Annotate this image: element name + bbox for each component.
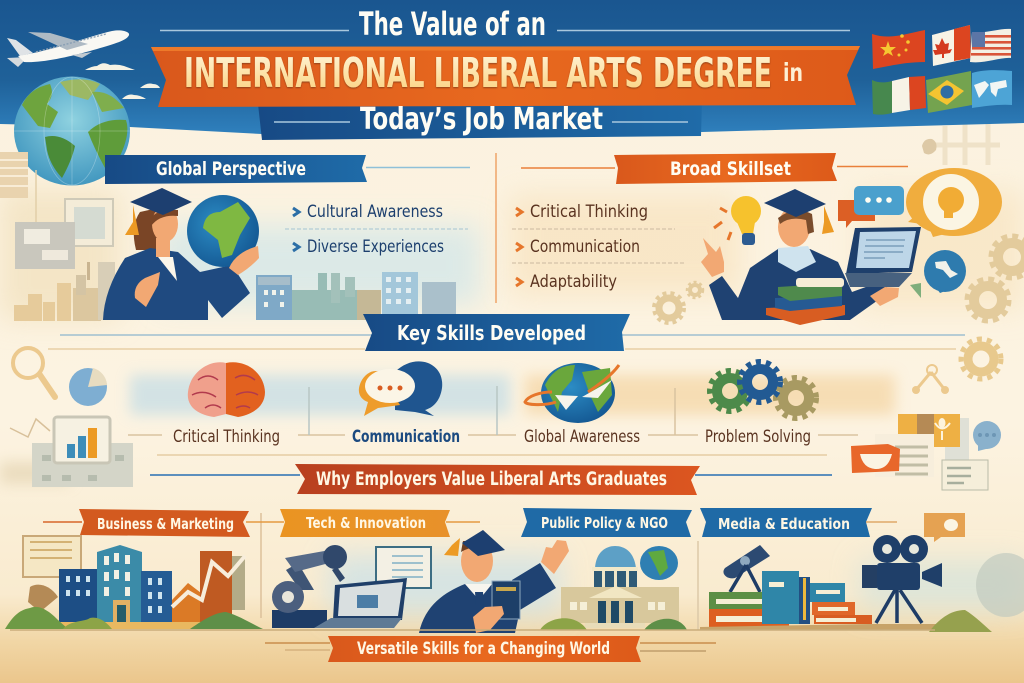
laptop <box>845 227 921 287</box>
section lines <box>48 335 965 349</box>
ribbon: Business & Marketing: Business & Marketing <box>97 515 234 533</box>
icon: orange card <box>851 444 900 473</box>
central graduate <box>419 530 569 633</box>
icon: light bulb <box>714 196 761 245</box>
shrubs, back <box>28 585 58 612</box>
divider <box>260 513 262 618</box>
icon: telescope <box>723 545 770 592</box>
growth chart <box>172 551 245 622</box>
ground strip and shrub <box>700 553 1024 632</box>
title banner <box>151 46 860 107</box>
key skill separators <box>128 386 858 435</box>
flag: USA <box>970 29 1011 62</box>
note board <box>23 536 81 577</box>
icon: small globe <box>640 546 678 580</box>
sector: media and education <box>700 508 1024 632</box>
ground and shrubs <box>5 607 263 629</box>
office buildings <box>59 545 172 622</box>
key skill: communication <box>352 361 460 447</box>
ground line <box>10 629 935 631</box>
ribbon: Media & Education <box>700 508 897 537</box>
ribbon: Public Policy & NGO: Public Policy & NGO <box>541 514 668 532</box>
flag: Italy <box>872 76 926 115</box>
ribbon: Versatile Skills for a Changing World <box>265 636 716 662</box>
icon: movie camera <box>862 535 942 623</box>
list: skill bullets: Adaptability <box>530 272 617 292</box>
ribbon: Tech & Innovation: Tech & Innovation <box>306 514 426 532</box>
icon: orange chat note <box>924 513 965 542</box>
divider <box>697 541 699 630</box>
icon: government building <box>540 546 687 630</box>
icon: brain <box>188 362 265 417</box>
icon: grey note <box>942 460 988 490</box>
decorative left: magnifier, pie, chart building <box>10 348 133 487</box>
title banner: in <box>783 58 803 87</box>
ribbon: Key Skills Developed: Key Skills Developed <box>397 321 586 345</box>
icon: airplane <box>7 30 129 67</box>
flag: China <box>872 30 925 69</box>
panel: broad skillset <box>512 153 1024 325</box>
list: skill bullets <box>512 202 686 292</box>
icon: yellow card with microphone <box>898 414 960 447</box>
ribbon: Today's Job Market <box>258 100 702 140</box>
icon: stacked books <box>709 571 872 627</box>
background washes <box>0 190 1024 615</box>
icon: chat bubbles <box>359 361 442 416</box>
graduate with globe <box>103 188 259 320</box>
key skill: communication: Communication <box>352 427 460 447</box>
decorative gears <box>654 236 1024 323</box>
ribbon: Global Perspective: Global Perspective <box>156 158 306 180</box>
icon: globe with arrows <box>525 363 619 423</box>
flags <box>872 25 1012 115</box>
icon: blue chat bubble <box>973 421 1001 451</box>
graduate with books and laptop <box>701 189 921 325</box>
ribbon: Versatile Skills for a Changing World: Versatile Skills for a Changing World <box>357 639 610 659</box>
icon: laptop <box>314 578 407 628</box>
sector: business and marketing <box>5 509 263 629</box>
list: skill bullets: Critical Thinking <box>530 202 648 222</box>
divider between panels <box>495 153 497 303</box>
key skill: global awareness: Global Awareness <box>524 427 640 447</box>
icon: gears <box>710 362 816 418</box>
decorative grid and rock, upper right <box>922 124 1000 165</box>
list: global bullets <box>285 202 468 257</box>
screen panel <box>376 547 431 588</box>
ribbon: Business & Marketing <box>43 509 250 537</box>
key skill: problem solving <box>705 362 816 447</box>
clouds <box>85 63 160 99</box>
ribbon: Public Policy & NGO <box>521 508 692 537</box>
title line 1: The Value of an <box>359 5 546 43</box>
flag: Canada <box>932 25 971 66</box>
panel: global perspective <box>0 152 470 321</box>
icon: robot arm <box>272 545 347 628</box>
key skill: critical thinking: Critical Thinking <box>173 427 280 447</box>
title line 3: Today’s Job Market <box>360 102 603 137</box>
city skyline, warm <box>14 262 115 321</box>
decorative right: gear and network <box>912 339 1001 394</box>
key skill: problem solving: Problem Solving <box>705 427 811 447</box>
ribbon: Tech & Innovation <box>246 509 480 537</box>
ribbon: Media & Education: Media & Education <box>718 515 850 533</box>
icons: speech bubbles <box>838 168 1002 298</box>
document back panel <box>945 418 969 482</box>
decorative documents <box>0 152 113 269</box>
icon: large globe <box>14 76 130 186</box>
document with lines <box>875 434 934 477</box>
ribbon: Broad Skillset: Broad Skillset <box>670 158 791 180</box>
ribbon: Global Perspective <box>105 155 470 184</box>
books <box>766 278 845 325</box>
ribbon: Why Employers Value Liberal Arts Graduates <box>150 455 832 495</box>
list: global bullets: Diverse Experiences <box>307 237 444 257</box>
key skill: critical thinking <box>173 362 280 447</box>
key skill: global awareness <box>524 363 640 447</box>
ribbon: Broad Skillset <box>521 153 908 184</box>
list: skill bullets: Communication <box>530 237 640 257</box>
header blue band <box>0 0 1024 134</box>
sector: tech and innovation <box>246 509 480 628</box>
flag: Brazil <box>926 71 972 113</box>
flag: world map <box>972 70 1012 108</box>
sector: public policy and NGO <box>521 508 692 630</box>
list: global bullets: Cultural Awareness <box>307 202 443 222</box>
ribbon: Why Employers Value Liberal Arts Graduates: Why Employers Value Liberal Arts Graduates <box>316 469 667 490</box>
ribbon: Key Skills Developed <box>363 314 630 351</box>
city skyline, cool <box>256 272 456 320</box>
